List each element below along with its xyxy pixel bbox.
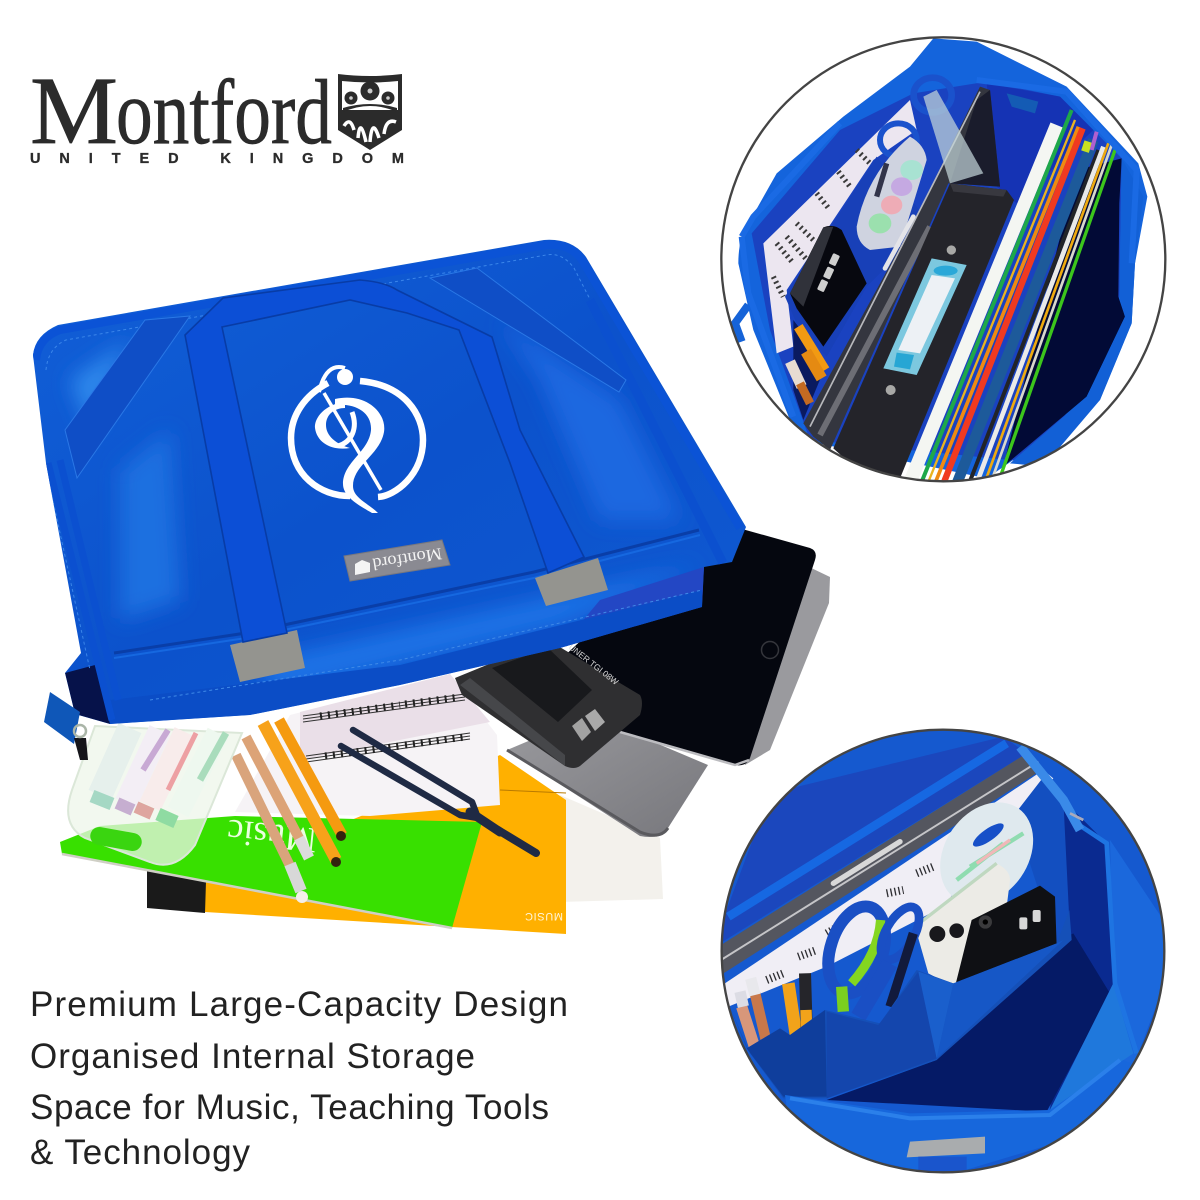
- strap end: [918, 1157, 967, 1177]
- bag body: [33, 240, 746, 760]
- tuner label: TUNER TGI 08W: [563, 639, 621, 687]
- ring binder: [833, 183, 1014, 478]
- right inner wall: [1050, 800, 1113, 1110]
- bag fabric: [722, 730, 1164, 1170]
- brand logo: [30, 57, 404, 167]
- icon: crest shield: [338, 74, 402, 150]
- logo strapline: UNITED KINGDOM: [30, 151, 404, 167]
- feature line: Organised Internal Storage: [30, 1037, 475, 1076]
- feature line: Premium Large-Capacity Design: [30, 985, 568, 1024]
- lower bag zip band: [110, 590, 702, 724]
- coloured folders: [903, 110, 1115, 498]
- clip-on tuner: [455, 639, 642, 768]
- outer bag fabric: [738, 38, 1147, 478]
- lower lining panel: [560, 567, 704, 648]
- bag edge binding: [33, 268, 690, 440]
- zip pull tab: [44, 692, 88, 760]
- inset circle outline: [721, 37, 1165, 481]
- feature list: [30, 985, 568, 1172]
- highlighter case: [857, 137, 927, 250]
- icon: scissors: [818, 899, 927, 1017]
- pencils and pens: [740, 973, 807, 1048]
- tablet: [560, 527, 816, 765]
- clip-on tuner: [790, 226, 867, 347]
- dark bag floor: [827, 933, 1110, 1112]
- front organiser pockets: [728, 910, 1072, 1098]
- plastic ruler: [923, 90, 983, 183]
- notebook black spine: [147, 869, 206, 913]
- dark upper lining: [987, 83, 1093, 203]
- right corner webbing: [430, 268, 626, 392]
- bag lining: [752, 82, 1122, 463]
- top circular inset: inside of the bag: [721, 37, 1165, 498]
- silver tablet back edge: [720, 565, 830, 765]
- logo wordmark: [30, 57, 332, 164]
- white sketchbook: [560, 795, 663, 902]
- blue rear panel: [950, 780, 1069, 943]
- logo circle and clef: [291, 367, 423, 513]
- zip line on the right: [1077, 823, 1137, 1053]
- orange music notebook: [205, 755, 566, 934]
- grey strap tab left: [230, 630, 305, 682]
- bag fabric highlights: [66, 336, 673, 682]
- sheet music: [235, 674, 500, 816]
- right fabric shadow: [1010, 158, 1143, 467]
- bag stitching: [150, 590, 702, 700]
- sheet music: [763, 100, 917, 353]
- bag zip edge: [738, 82, 1140, 294]
- clip-on tuner: [955, 886, 1057, 987]
- feature line: & Technology: [30, 1133, 250, 1172]
- flap bottom seam: [114, 530, 699, 653]
- main product photo: bag with contents: [33, 240, 830, 934]
- laptop: [507, 715, 708, 837]
- bottom circular inset: organiser pockets: [710, 720, 1177, 1187]
- dark pencil pocket: [793, 320, 820, 420]
- sheet music: [720, 770, 1053, 1007]
- logo wordmark: ontford: [116, 61, 332, 163]
- icon: scissors handles: [880, 78, 952, 157]
- notebook title: MUSIC: [525, 910, 563, 922]
- label brand text: Montford: [371, 544, 443, 574]
- highlighter case: [921, 784, 1052, 922]
- left corner webbing: [65, 316, 190, 478]
- inset circle outline: [722, 730, 1164, 1172]
- notebook title: Music: [225, 812, 319, 861]
- tuning fork: [341, 730, 536, 853]
- top flap: [717, 737, 1027, 943]
- laptop edge: [803, 87, 1000, 450]
- dark interior: [1003, 158, 1125, 467]
- woven brand label: [344, 540, 450, 581]
- feature line: Space for Music, Teaching Tools: [30, 1088, 549, 1127]
- binder label: [883, 258, 967, 375]
- smartphone: [915, 863, 1010, 987]
- front zip edge: [785, 1060, 1140, 1177]
- strap loop: [735, 305, 748, 342]
- interior pocket: [785, 156, 878, 304]
- grey strap tab right: [535, 558, 608, 606]
- flap binding upper right: [1020, 747, 1080, 830]
- green music notebook: [60, 812, 482, 928]
- light right panel: [1050, 840, 1163, 1110]
- pencils: [236, 720, 346, 903]
- logo wordmark: M: [30, 57, 118, 164]
- laptop band: [718, 753, 1042, 977]
- grey strap tab: [907, 1137, 985, 1157]
- zip pull: [1007, 93, 1038, 113]
- bag handles: [185, 280, 584, 642]
- highlighter case: [68, 726, 242, 865]
- pencils: [790, 327, 825, 403]
